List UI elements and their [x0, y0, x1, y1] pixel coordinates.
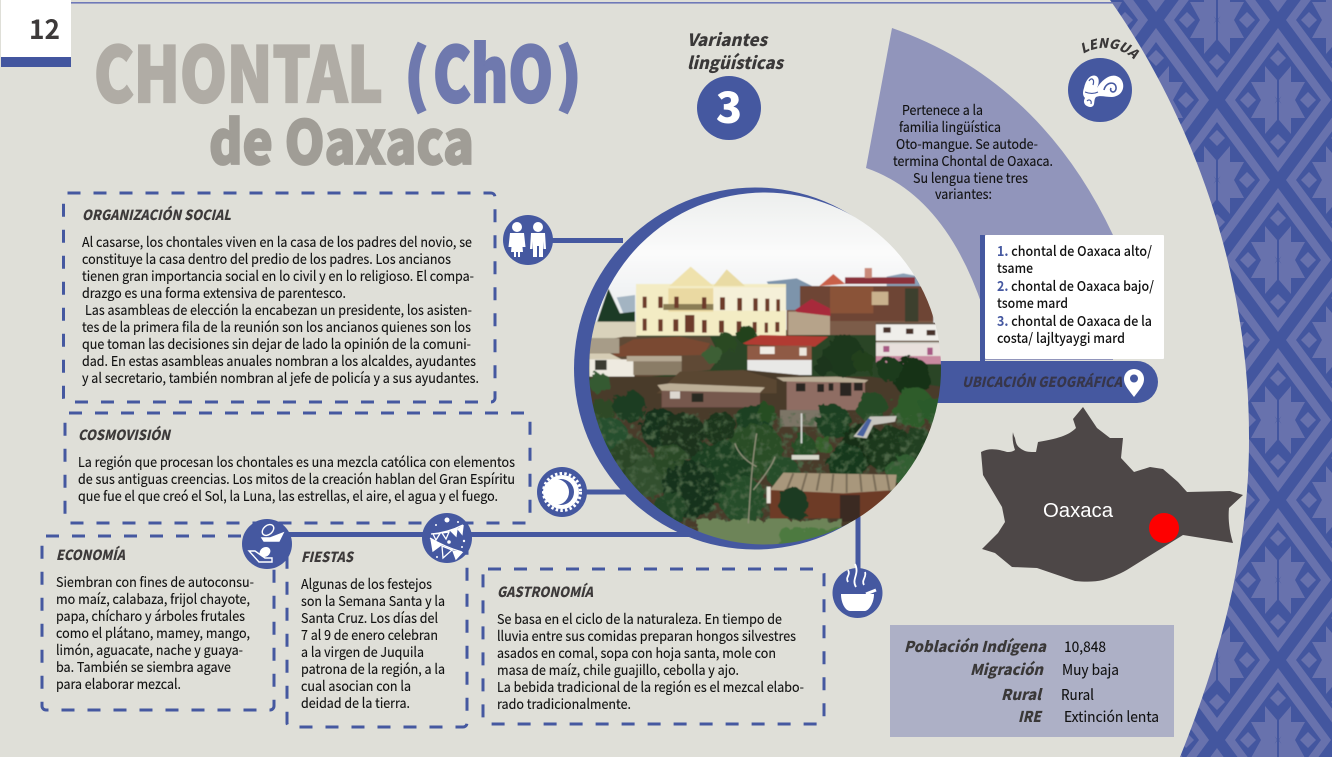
connector lines: [267, 238, 860, 580]
text block: fiestas: a la virgen de Juquila: [301, 641, 424, 661]
heading: fiestas: FIESTAS: [301, 547, 355, 567]
text block: economía: mo maíz, calabaza, frijol chayote,: [56, 588, 250, 608]
top rule: [71, 2, 1116, 4]
panel: variants list: costa/ lajltyaygi mard: [997, 327, 1125, 347]
text block: fiestas: Santa Cruz. Los días del: [301, 607, 438, 627]
text block: gastronomía: lluvia entre sus comidas preparan hongos silvestres: [497, 625, 796, 645]
variantes count badge: 3: [716, 74, 742, 136]
heading: cosmovisión: COSMOVISIÓN: [78, 425, 172, 445]
text block: organización social: tienen gran importancia social en lo civil y en lo religioso. El compa-: [82, 265, 474, 285]
panel: gastronomía: [483, 569, 824, 724]
text block: economía: como el plátano, mamey, mango,: [56, 622, 250, 642]
variantes heading: lingüísticas: [687, 49, 785, 74]
icon: hands and seeds: [242, 519, 292, 569]
text block: organización social: que toman las decisiones sin dejar de lado la opinión de la comuni-: [82, 333, 471, 353]
panel: cosmovisión: [65, 413, 530, 523]
text block: fiestas: [301, 573, 445, 712]
text block: economía: Siembran con fines de autoconsu-: [56, 571, 254, 591]
map: Oaxaca: Oaxaca: [1043, 500, 1114, 522]
text block: organización social: Al casarse, los chontales viven en la casa de los padres del novio, se: [82, 231, 472, 251]
variantes count badge: [697, 74, 761, 140]
ubicación pill: UBICACIÓN GEOGRÁFICA: [962, 372, 1123, 392]
variantes heading: [687, 26, 785, 74]
heading: organización social: ORGANIZACIÓN SOCIAL: [82, 205, 232, 225]
location marker: [1149, 513, 1179, 543]
text block: organización social: dad. En estas asambleas anuales nombran a los alcaldes, ayudantes: [82, 350, 476, 370]
text block: gastronomía: Se basa en el ciclo de la naturaleza. En tiempo de: [497, 608, 782, 628]
connector over boxes: [267, 532, 447, 537]
text block: organización social: constituye la casa dentro del predio de los padres. Los ancianos: [82, 248, 451, 268]
heading: gastronomía: GASTRONOMÍA: [497, 582, 594, 602]
panel: fiestas: [287, 534, 467, 727]
text block: organización social: [82, 231, 479, 387]
panel: lengua wedge: variantes:: [935, 183, 992, 203]
panel: variants list: 3. chontal de Oaxaca de la: [997, 310, 1152, 330]
panel: variants list: 1. chontal de Oaxaca alto/: [997, 240, 1153, 260]
icon: sun and moon: [537, 467, 587, 517]
text block: economía: limón, aguacate, nache y guaya-: [56, 639, 243, 659]
panel: stats: Muy baja: [1062, 659, 1119, 680]
panel: stats: 10,848: [1064, 636, 1106, 657]
panel: stats: [890, 625, 1174, 737]
text block: organización social: y al secretario, también nombran al jefe de policía y a sus ayudantes.: [82, 367, 479, 387]
title: ChO: [433, 14, 553, 124]
variantes heading: Variantes: [687, 26, 769, 51]
map: Oaxaca: [981, 407, 1243, 582]
text block: fiestas: deidad de la tierra.: [301, 692, 410, 712]
panel: lengua wedge: Oto-mangue. Se autode-: [896, 133, 1038, 153]
ubicación pill: [920, 361, 1158, 403]
panel: organización social: [64, 193, 495, 402]
title: CHONTAL: [94, 14, 383, 124]
text block: organización social: drazgo es una forma extensiva de parentesco.: [82, 282, 346, 302]
lengua label: LENGUA: [1082, 38, 1140, 60]
text block: fiestas: patrona de la región, a la: [301, 658, 445, 678]
panel: stats: Población Indígena: [904, 636, 1047, 657]
panel: lengua wedge: termina Chontal de Oaxaca.: [893, 150, 1053, 170]
text block: gastronomía: asados en comal, sopa con hoja santa, mole con: [497, 642, 776, 662]
panel: lengua wedge: [866, 28, 1113, 360]
panel: lengua wedge: Pertenece a la: [902, 99, 983, 119]
photo: hillside town: [589, 192, 941, 544]
page number tab: 12: [29, 8, 60, 47]
panel: economía: [42, 536, 274, 710]
text block: economía: papa, chícharo y árboles frutales: [56, 605, 245, 625]
panel: variants list: 2. chontal de Oaxaca bajo/: [997, 275, 1155, 295]
text block: organización social: Las asambleas de elección la encabezan un presidente, los asisten-: [85, 299, 472, 319]
photo ring: [574, 188, 936, 550]
panel: variants list: [980, 235, 1164, 363]
panel: variants list: tsame: [997, 257, 1033, 277]
panel: stats: Migración: [970, 659, 1044, 680]
text block: fiestas: 7 al 9 de enero celebran: [301, 624, 438, 644]
text block: economía: ba. También se siembra agave: [56, 656, 231, 676]
icon: festive bunting: [422, 513, 472, 563]
text block: economía: para elaborar mezcal.: [56, 673, 181, 693]
panel: stats: Rural: [1001, 684, 1043, 705]
text block: cosmovisión: La región que procesan los chontales es una mezcla católica con elementos: [78, 451, 515, 471]
icon: people: [503, 215, 553, 265]
text block: gastronomía: [497, 608, 804, 713]
text block: gastronomía: masa de maíz, chile guajillo, cebolla y ajo.: [497, 659, 739, 679]
text block: cosmovisión: de sus antiguas creencias. Los mitos de la creación hablan del Gran Espíritu: [78, 468, 515, 488]
panel: lengua wedge: Su lengua tiene tres: [913, 167, 1028, 187]
textile pattern band: [1110, 0, 1332, 757]
panel: stats: Extinción lenta: [1064, 706, 1159, 727]
panel: variants list: tsome mard: [997, 292, 1068, 312]
icon: steaming bowl: [832, 564, 882, 618]
text block: economía: [56, 571, 254, 693]
heading: economía: ECONOMÍA: [56, 545, 126, 565]
icon: lengua swirl: [1068, 58, 1132, 122]
text block: gastronomía: rado tradicionalmente.: [497, 693, 631, 713]
title: [94, 14, 581, 182]
title: ): [557, 23, 581, 119]
text block: fiestas: son la Semana Santa y la: [301, 590, 445, 610]
text block: gastronomía: La bebida tradicional de la región es el mezcal elabo-: [497, 676, 804, 696]
title: de Oaxaca: [209, 95, 474, 182]
text block: cosmovisión: [78, 451, 515, 505]
text block: organización social: tes de la primera fila de la reunión son los ancianos quienes son los: [82, 316, 471, 336]
text block: cosmovisión: que fue el que creó el Sol, la Luna, las estrellas, el aire, el agua y el fuego.: [78, 485, 498, 505]
panel: stats: IRE: [1018, 706, 1043, 727]
page number tab: [1, 0, 71, 67]
panel: stats: Rural: [1061, 684, 1094, 705]
text block: fiestas: Algunas de los festejos: [301, 573, 432, 593]
title: (: [405, 23, 428, 119]
text block: fiestas: cual asocian con la: [301, 675, 411, 695]
panel: lengua wedge: familia lingüística: [899, 116, 1001, 136]
